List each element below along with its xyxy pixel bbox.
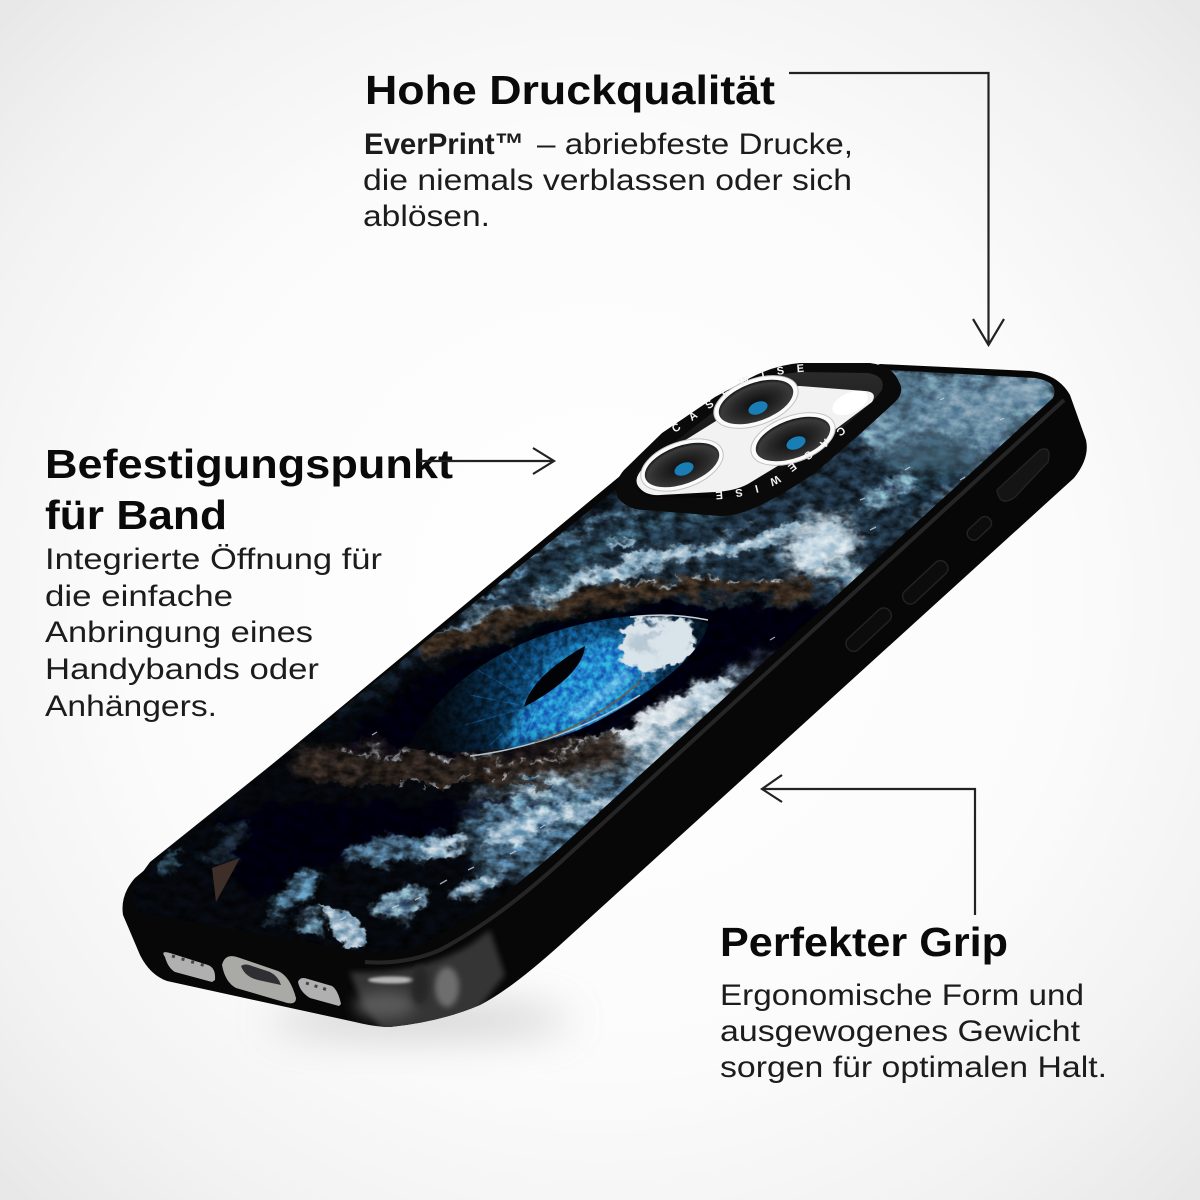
heading: Perfekter Grip	[720, 919, 1008, 965]
ring inner bevel	[634, 372, 883, 498]
camera ring	[616, 363, 901, 516]
pale lower skin	[460, 647, 776, 822]
arrow: strap attachment	[420, 448, 554, 474]
snow flecks	[340, 398, 1004, 920]
corner highlight	[350, 930, 505, 1032]
ring brand text bottom: CASEWISE	[716, 428, 845, 500]
body text: die einfache	[45, 580, 233, 613]
side buttons	[843, 449, 1049, 654]
upper streaks	[470, 505, 640, 610]
heading: für Band	[45, 492, 227, 538]
lens top	[707, 365, 805, 439]
body text: EverPrint™	[364, 128, 524, 161]
black area under lid	[215, 790, 520, 900]
callout: perfect grip	[720, 919, 1107, 1084]
lower icy patches	[465, 775, 640, 880]
bottom speaker right	[298, 978, 341, 1006]
upper dark scales	[300, 370, 1060, 740]
body text	[720, 979, 1107, 1084]
eye surround	[408, 614, 708, 752]
body text: Integrierte Öffnung für	[45, 543, 382, 576]
icy top-right area	[860, 372, 1058, 455]
body text: Ergonomische Form und	[720, 979, 1084, 1012]
body text: Anbringung eines	[45, 616, 313, 649]
lens right	[744, 402, 842, 476]
lens left	[634, 429, 730, 501]
printed artwork: dragon eye	[120, 360, 1080, 970]
camera island	[616, 363, 902, 516]
lower lid brown	[295, 745, 625, 775]
iris rays	[465, 622, 590, 748]
body text: – abriebfeste Drucke,	[537, 128, 853, 161]
flash	[829, 386, 871, 420]
body text: Anhängers.	[45, 690, 217, 723]
arrow: print quality	[789, 73, 1004, 345]
body text	[363, 128, 853, 233]
scale grain	[156, 370, 1054, 950]
eye	[408, 614, 708, 757]
brown brow	[420, 585, 810, 652]
iris	[408, 614, 708, 752]
iris texture	[440, 615, 704, 752]
callout: strap attachment	[45, 441, 453, 723]
heading	[45, 441, 453, 538]
black socket	[330, 602, 840, 760]
bottom speaker left	[163, 952, 215, 982]
upper glint	[630, 615, 708, 620]
camera window	[636, 386, 874, 495]
spike	[212, 858, 240, 902]
painted scales and ice	[153, 370, 1060, 948]
ring brand text top: CASEWISE	[672, 364, 804, 432]
phone case	[122, 363, 1087, 1027]
body text: sorgen für optimalen Halt.	[720, 1051, 1107, 1084]
heading: Hohe Druckqualität	[365, 67, 775, 113]
phone shadow	[270, 1002, 570, 1038]
body text: ablösen.	[363, 200, 490, 233]
body text	[45, 543, 382, 723]
arrow: perfect grip	[762, 775, 975, 915]
body text: ausgewogenes Gewicht	[720, 1015, 1081, 1048]
callout: print quality	[363, 67, 853, 233]
body text: Handybands oder	[45, 653, 319, 686]
case body	[122, 364, 1087, 1027]
side rim highlight	[365, 400, 1064, 962]
lower lid glint	[470, 695, 640, 756]
soft bokeh over top right	[865, 372, 1058, 470]
iris lower amber rim	[535, 682, 640, 742]
body text: die niemals verblassen oder sich	[363, 164, 852, 197]
sclera reflection	[617, 617, 697, 680]
charging port	[222, 956, 296, 1003]
pupil	[524, 646, 585, 707]
snow band above brow	[535, 525, 800, 604]
heading: Befestigungspunkt	[45, 441, 453, 487]
